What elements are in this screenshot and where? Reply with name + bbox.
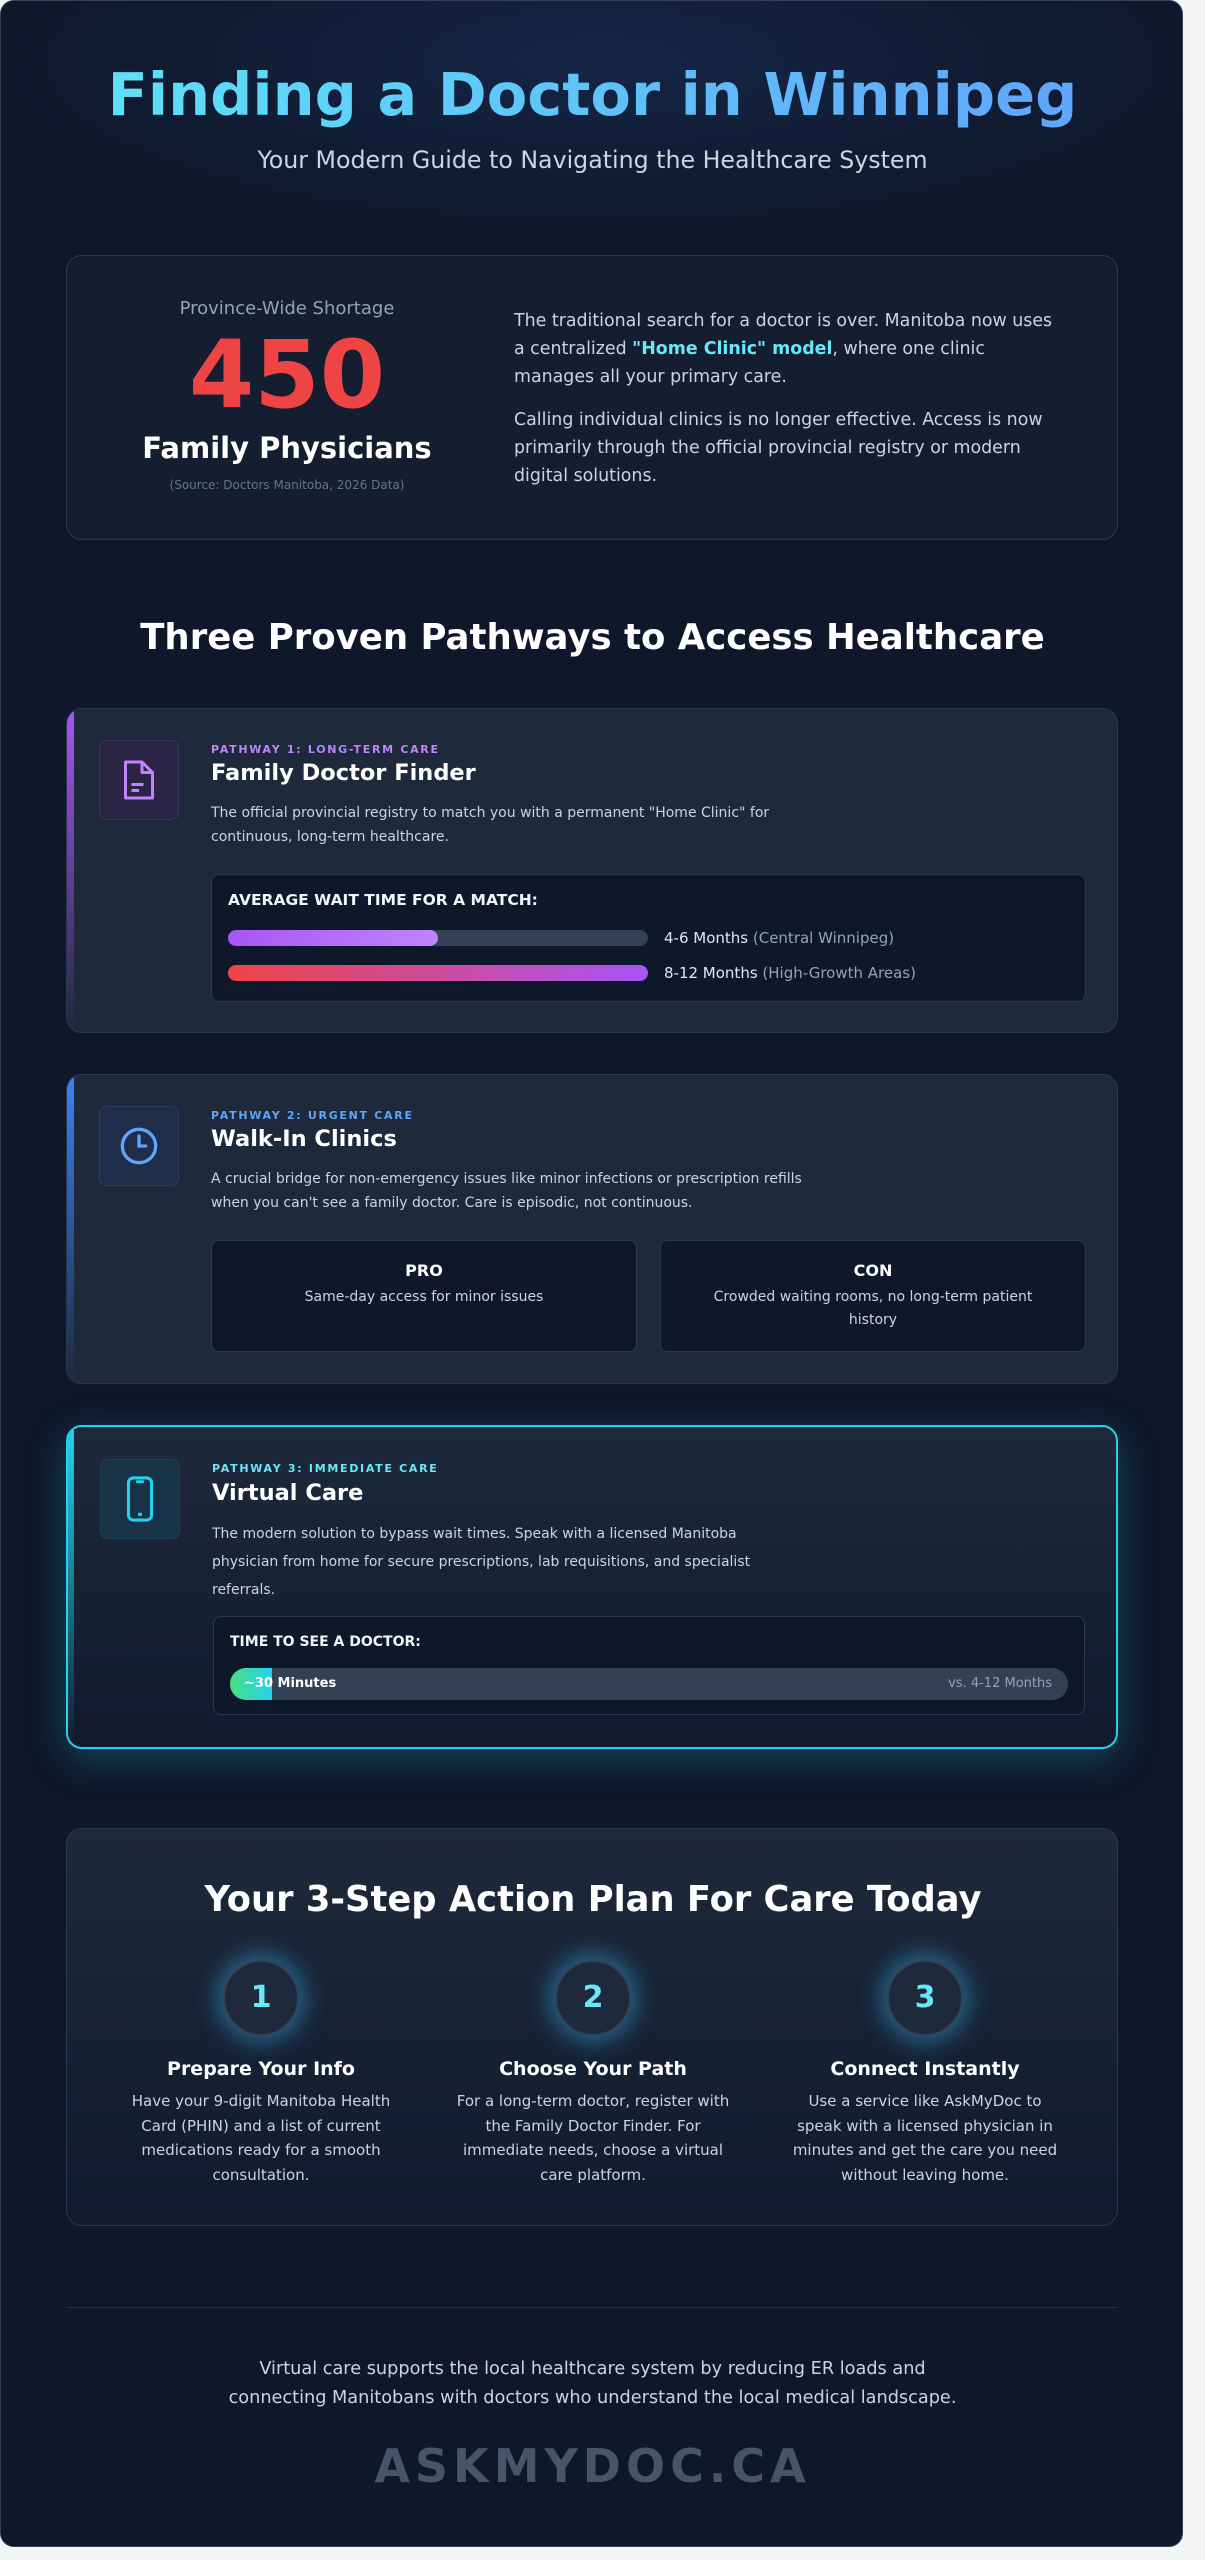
icon: document <box>99 740 179 820</box>
step 3: Use a service like AskMyDoc to speak with a licensed physician in minutes and get the care you need without leaving home. <box>793 2092 1057 2184</box>
chart: wait times: AVERAGE WAIT TIME FOR A MATCH: <box>228 891 538 909</box>
step 3 <box>793 1941 1057 2184</box>
step 2: Choose Your Path <box>499 2058 687 2080</box>
step 3: 3 <box>915 1980 935 2015</box>
description: The official provincial registry to match you with a permanent "Home Clinic" for continuous, long-term healthcare. <box>211 805 769 845</box>
brand logo text: ASKMYDOC.CA <box>374 2439 811 2493</box>
stat block: Province-Wide Shortage <box>180 298 394 319</box>
chart: time to see doctor: vs. 4-12 Months <box>948 1676 1052 1691</box>
chart: wait times: 4-6 Months (Central Winnipeg) <box>664 929 894 947</box>
heading: pathways: Three Proven Pathways to Access Healthcare <box>140 617 1045 658</box>
step 2 <box>457 1941 729 2184</box>
heading: Walk-In Clinics <box>211 1126 397 1152</box>
heading: Virtual Care <box>212 1480 363 1506</box>
con box: Crowded waiting rooms, no long-term patient history <box>714 1289 1032 1328</box>
heading: Your 3-Step Action Plan For Care Today <box>204 1879 982 1920</box>
chart: wait times <box>211 874 1086 1002</box>
con box: CON <box>854 1261 892 1280</box>
step 1: 1 <box>251 1980 271 2015</box>
footer text: connecting Manitobans with doctors who understand the local medical landscape. <box>229 2388 956 2408</box>
label: PATHWAY 1: LONG-TERM CARE <box>211 743 440 756</box>
panel: pathway 3 <box>66 1425 1118 1749</box>
stat block: 450 <box>189 321 385 430</box>
intro text: Calling individual clinics is no longer effective. Access is now primarily through the official provincial registry or modern digital solutions. <box>514 410 1043 486</box>
footer text: Virtual care supports the local healthcare system by reducing ER loads and <box>259 2359 926 2379</box>
description: A crucial bridge for non-emergency issues like minor infections or prescription refills when you can't see a family doctor. Care is episodic, not continuous. <box>211 1171 802 1211</box>
subtitle: Your Modern Guide to Navigating the Healthcare System <box>257 146 928 174</box>
footer text <box>229 2359 956 2408</box>
step 2: For a long-term doctor, register with the Family Doctor Finder. For immediate needs, choose a virtual care platform. <box>457 2092 729 2184</box>
title: Finding a Doctor in Winnipeg <box>108 60 1077 129</box>
step 1 <box>132 1941 390 2184</box>
stat block: Family Physicians <box>142 431 432 465</box>
chart: time to see doctor: TIME TO SEE A DOCTOR: <box>230 1634 421 1650</box>
con box <box>660 1240 1086 1352</box>
chart: time to see doctor <box>213 1616 1085 1715</box>
heading: Family Doctor Finder <box>211 760 476 786</box>
step 3: Connect Instantly <box>830 2058 1020 2080</box>
label: PATHWAY 3: IMMEDIATE CARE <box>212 1462 438 1475</box>
panel: pathway 2 <box>66 1074 1118 1384</box>
panel: shortage stats <box>66 255 1118 540</box>
chart: wait times: 8-12 Months (High-Growth Areas) <box>664 964 916 982</box>
pro box <box>211 1240 637 1352</box>
description: The modern solution to bypass wait times. Speak with a licensed Manitoba physician from home for secure prescriptions, lab requisitions, and specialist referrals. <box>212 1526 750 1598</box>
step 1: Have your 9-digit Manitoba Health Card (PHIN) and a list of current medications ready for a smooth consultation. <box>132 2092 390 2184</box>
pro box: Same-day access for minor issues <box>305 1289 543 1305</box>
chart: time to see doctor: ~30 Minutes <box>244 1676 336 1691</box>
step 1: Prepare Your Info <box>167 2058 355 2080</box>
step 2: 2 <box>583 1980 603 2015</box>
stat block <box>142 298 432 492</box>
stat block: (Source: Doctors Manitoba, 2026 Data) <box>170 478 404 492</box>
panel: pathway 1 <box>66 708 1118 1033</box>
panel: action plan <box>66 1828 1118 2226</box>
intro text <box>514 311 1052 486</box>
icon: clock <box>99 1106 179 1186</box>
intro text: The traditional search for a doctor is over. Manitoba now uses a centralized "Home Clinic" model, where one clinic manages all your primary care. <box>514 311 1052 387</box>
label: PATHWAY 2: URGENT CARE <box>211 1109 414 1122</box>
pro box: PRO <box>405 1261 443 1280</box>
icon: phone <box>100 1459 180 1539</box>
